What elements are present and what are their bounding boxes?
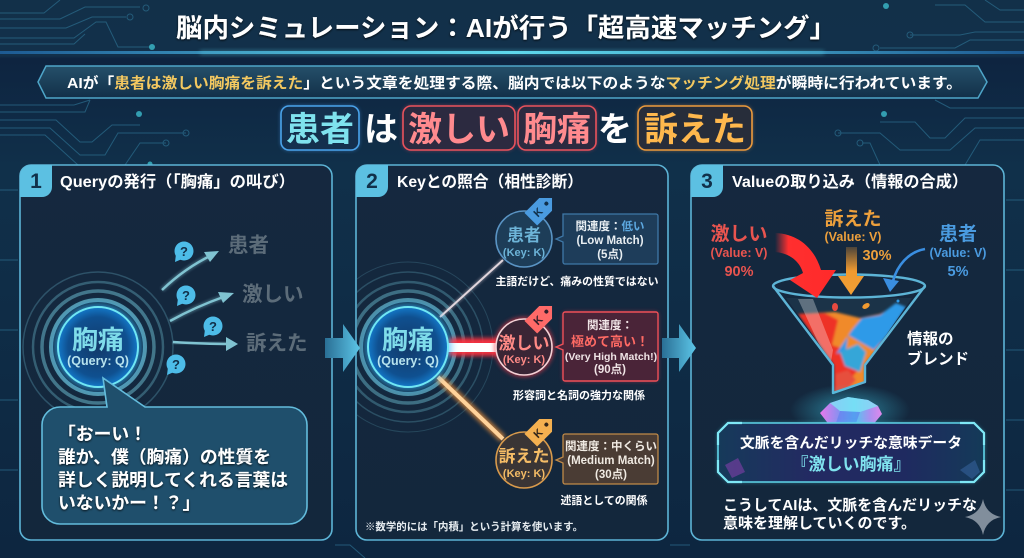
value label: severe: (Value: V) <box>711 246 767 260</box>
panel 3 heading: Valueの取り込み（情報の合成） <box>732 172 968 191</box>
example sentence chips: は <box>364 111 398 149</box>
footnote: ※数学的には「内積」という計算を使います。 <box>365 520 583 533</box>
rich data box: 文脈を含んだリッチな意味データ <box>740 434 962 452</box>
rich data box: 『激しい胸痛』 <box>792 454 910 474</box>
speech bubble: 「おーい！ <box>58 424 147 444</box>
value label: patient: (Value: V) <box>930 246 986 260</box>
value label: severe: 90% <box>724 264 754 280</box>
rings <box>357 262 493 432</box>
key: complained: (Key: K) <box>503 468 545 480</box>
key: severe: (Key: K) <box>503 354 545 366</box>
header divider glow <box>0 50 1024 55</box>
flow arrow: red <box>775 233 836 298</box>
candidate words: 患者 <box>228 234 269 257</box>
step 1 badge: 1 <box>30 170 42 193</box>
value label: patient <box>930 223 986 280</box>
query node <box>55 304 141 390</box>
closing text: 意味を理解していくのです。 <box>723 515 916 532</box>
funnel liquid <box>798 299 906 393</box>
step 1 badge <box>20 165 52 197</box>
key: severe: 激しい <box>498 334 550 353</box>
query signal rings <box>23 272 173 422</box>
query node <box>365 304 451 390</box>
arrow: step 1 to 2 <box>325 324 360 372</box>
key: complained: 訴えた <box>498 447 550 466</box>
match box: medium: (30点) <box>595 467 627 481</box>
example sentence chips: を <box>598 111 632 149</box>
match box: low: (Low Match) <box>576 235 644 247</box>
question bubbles: ? <box>172 357 180 372</box>
step 2 badge: 2 <box>366 170 378 193</box>
intro banner <box>38 66 987 98</box>
match box: low <box>556 214 658 264</box>
gem <box>790 384 910 436</box>
key: severe: K <box>532 314 546 328</box>
caption low: 主語だけど、痛みの性質ではない <box>496 274 658 288</box>
blend label: 情報の <box>907 329 954 348</box>
match box: very high <box>556 312 658 381</box>
candidate words: 訴えた <box>246 332 308 355</box>
speech bubble: 詳しく説明してくれる言葉は <box>58 470 288 490</box>
panel 1 heading: Queryの発行（「胸痛」の叫び） <box>60 172 295 191</box>
key: complained: K <box>532 427 546 441</box>
key: patient: 患者 <box>507 226 541 245</box>
speech bubble: いないかー！？」 <box>58 493 200 513</box>
step 2 badge <box>356 165 388 197</box>
closing text: こうしてAIは、文脈を含んだリッチな <box>723 496 977 514</box>
connection lines <box>438 260 503 439</box>
value label: patient: 患者 <box>939 223 977 245</box>
match box: medium <box>556 434 658 484</box>
value label: severe: 激しい <box>710 223 768 245</box>
value label: complained: 訴えた <box>824 208 882 230</box>
value label: patient: 5% <box>948 264 969 280</box>
rich data box <box>718 423 984 482</box>
key: patient <box>496 192 558 267</box>
closing text <box>723 496 977 532</box>
panel 2 heading: Keyとの照合（相性診断） <box>397 172 583 191</box>
match box: low: 関連度：低い <box>576 219 644 233</box>
match box: very high: (Very High Match!) <box>565 351 657 363</box>
example sentence chips: 激しい <box>408 111 510 149</box>
key: patient: (Key: K) <box>503 247 545 259</box>
example sentence chips: 胸痛 <box>523 111 591 149</box>
query node: (Query: Q) <box>377 354 439 368</box>
candidate words: 激しい <box>242 283 304 306</box>
query arrows <box>162 251 238 351</box>
panel 3: value <box>691 165 1004 540</box>
speech bubble: 誰か、僕（胸痛）の性質を <box>58 447 271 467</box>
speech bubble <box>42 378 307 524</box>
question bubbles <box>166 242 222 375</box>
flow arrow: blue <box>883 249 925 292</box>
match box: low: (5点) <box>597 247 623 261</box>
blend label <box>907 329 969 368</box>
intro banner: AIが「患者は激しい胸痛を訴えた 」という文章を処理する際、脳内では以下のような マッチング処理 が瞬時に行われています。 <box>67 74 962 92</box>
match box: very high: 関連度： <box>587 318 633 332</box>
question bubbles: ? <box>182 288 190 303</box>
query node: (Query: Q) <box>67 354 129 368</box>
question bubbles: ? <box>180 244 188 259</box>
example sentence chips: 患者 <box>286 111 354 149</box>
value label: complained: (Value: V) <box>825 230 881 244</box>
flow arrow: orange <box>838 247 864 295</box>
match box: medium: 関連度：中くらい <box>565 439 657 453</box>
step 3 badge: 3 <box>701 170 713 193</box>
value label: complained: 30% <box>862 248 892 264</box>
key: patient: K <box>532 206 546 220</box>
sparkle mark <box>965 499 1001 535</box>
match box: very high: (90点) <box>594 362 626 376</box>
example sentence chips <box>281 106 752 150</box>
panel 2: key <box>323 165 668 540</box>
example sentence chips: 訴えた <box>644 111 746 149</box>
panel 1: query <box>20 165 332 540</box>
droplets <box>832 300 900 311</box>
arrow: step 2 to 3 <box>662 324 696 372</box>
key: complained <box>496 413 558 488</box>
title: 脳内シミュレーション：AIが行う「超高速マッチング」 <box>176 13 836 43</box>
step 3 badge <box>691 165 723 197</box>
value label: complained <box>824 208 892 264</box>
question bubbles: ? <box>209 319 217 334</box>
key: severe <box>494 300 558 377</box>
query node: 胸痛 <box>72 325 124 355</box>
funnel <box>773 274 925 393</box>
match box: very high: 極めて高い！ <box>571 334 649 349</box>
blend label: ブレンド <box>907 349 969 368</box>
caption very high: 形容詞と名詞の強力な関係 <box>513 388 645 402</box>
match box: medium: (Medium Match) <box>567 455 655 467</box>
query node: 胸痛 <box>382 325 434 355</box>
caption medium: 述語としての関係 <box>560 493 648 507</box>
candidate words <box>228 234 308 355</box>
value label: severe <box>710 223 768 280</box>
